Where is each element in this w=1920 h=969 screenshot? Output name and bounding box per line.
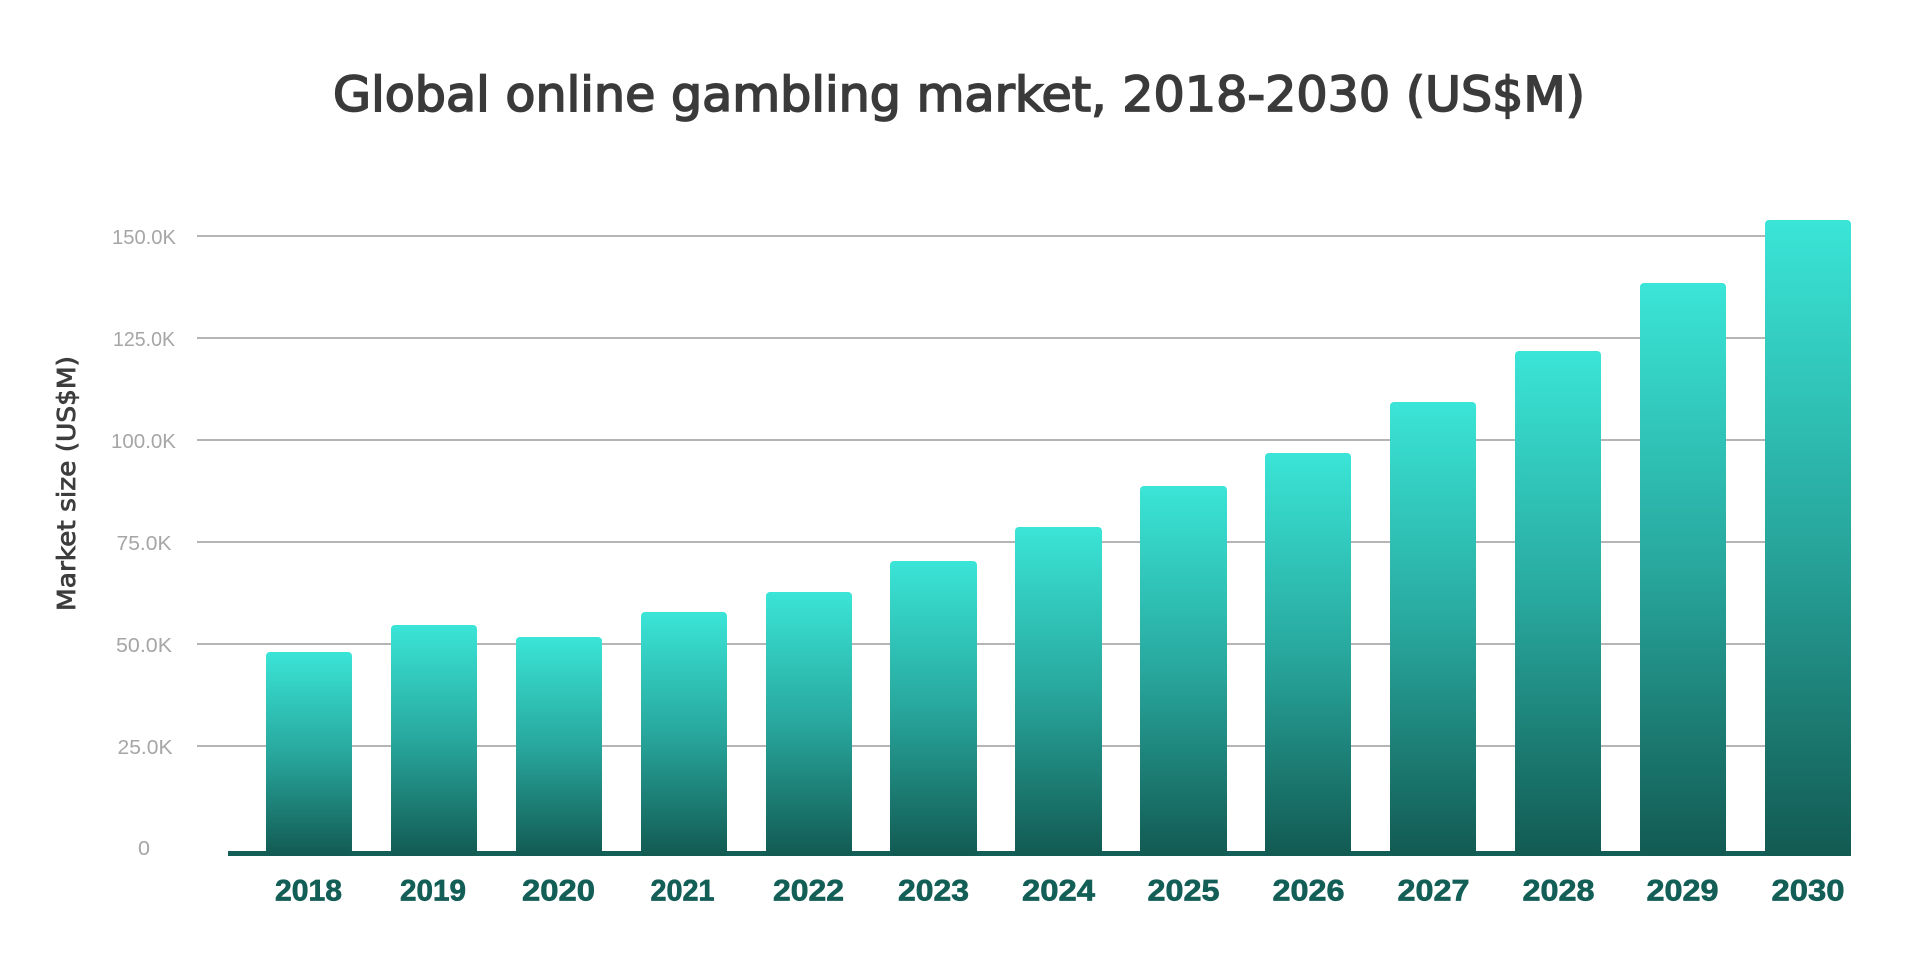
bar 2028 bbox=[1515, 351, 1601, 856]
x-axis year labels: 2021 bbox=[650, 874, 714, 908]
y-axis tick labels: 0 bbox=[138, 837, 150, 860]
bar 2020 bbox=[516, 637, 602, 856]
title: Global online gambling market, 2018-2030 (US$M) bbox=[333, 67, 1585, 123]
x-axis year labels: 2024 bbox=[1022, 874, 1096, 908]
x-axis baseline bbox=[228, 851, 1851, 856]
bar 2027 bbox=[1390, 402, 1476, 856]
x-axis year labels: 2020 bbox=[522, 874, 595, 908]
y-axis tick labels: 100.0K bbox=[111, 430, 176, 453]
bar 2026 bbox=[1265, 453, 1351, 856]
bar 2025 bbox=[1140, 486, 1227, 856]
x-axis year labels: 2026 bbox=[1272, 874, 1344, 908]
x-axis year labels: 2018 bbox=[275, 874, 342, 908]
bar 2021 bbox=[641, 612, 727, 856]
bar 2018 bbox=[266, 652, 352, 856]
y-axis tick labels: 150.0K bbox=[112, 226, 176, 249]
x-axis year labels: 2023 bbox=[898, 874, 969, 908]
y-axis tick labels: 75.0K bbox=[116, 532, 172, 555]
x-axis year labels: 2027 bbox=[1398, 874, 1470, 908]
x-axis year labels bbox=[275, 874, 1844, 908]
y-axis tick labels: 50.0K bbox=[116, 634, 172, 657]
x-axis year labels: 2022 bbox=[773, 874, 844, 908]
y-axis tick labels: 25.0K bbox=[118, 736, 173, 759]
bar 2024 bbox=[1015, 527, 1102, 856]
bar 2019 bbox=[391, 625, 477, 856]
gridlines bbox=[197, 235, 1851, 747]
x-axis year labels: 2029 bbox=[1646, 874, 1718, 908]
y-axis tick labels bbox=[111, 226, 176, 860]
y-axis tick labels: 125.0K bbox=[113, 328, 175, 351]
bar 2030 bbox=[1765, 220, 1851, 856]
bars bbox=[266, 220, 1851, 856]
bar 2023 bbox=[890, 561, 977, 856]
bar 2029 bbox=[1640, 283, 1726, 856]
y-axis title: Market size (US$M) bbox=[52, 356, 81, 611]
x-axis year labels: 2030 bbox=[1772, 874, 1844, 908]
x-axis year labels: 2028 bbox=[1522, 874, 1594, 908]
bar 2022 bbox=[766, 592, 852, 856]
x-axis year labels: 2025 bbox=[1148, 874, 1220, 908]
x-axis year labels: 2019 bbox=[400, 874, 466, 908]
